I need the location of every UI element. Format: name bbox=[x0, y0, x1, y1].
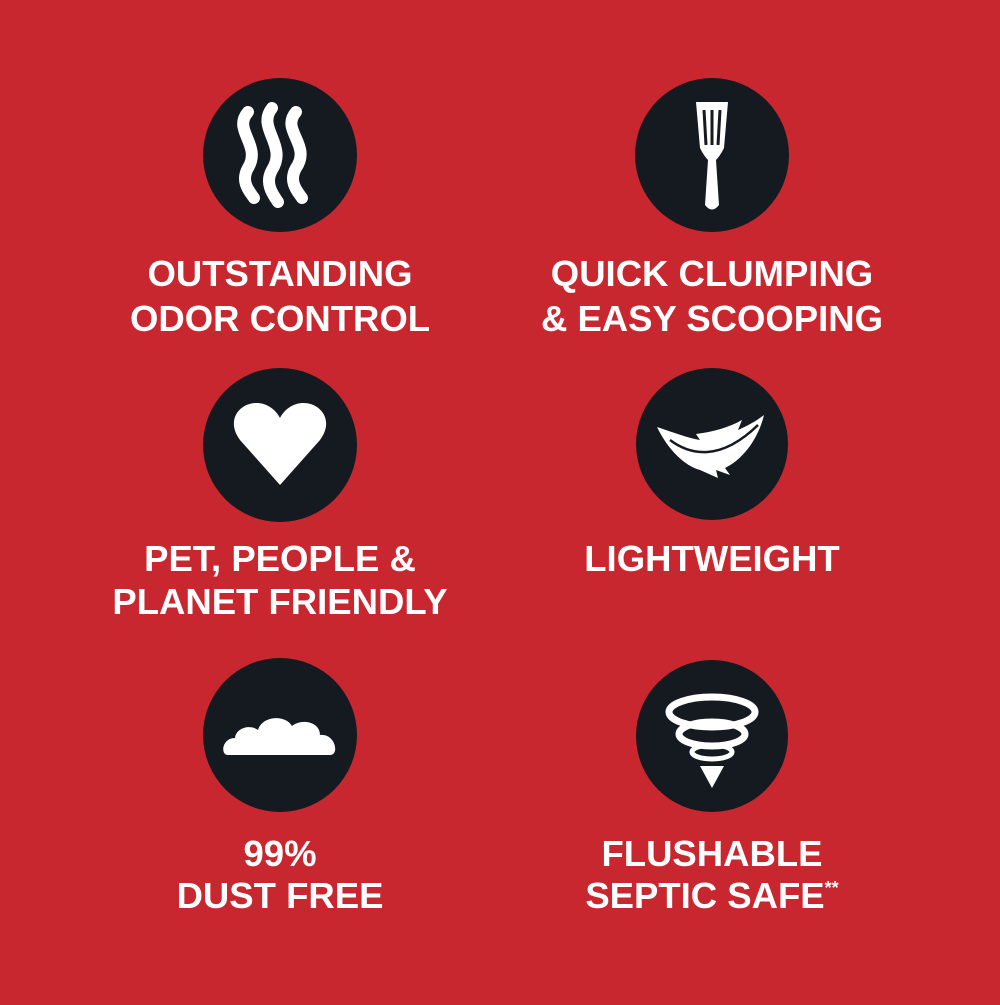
heading: flushable: FLUSHABLE bbox=[601, 833, 823, 874]
heading: flushable: ** bbox=[825, 878, 839, 898]
heading: flushable: SEPTIC SAFE bbox=[585, 875, 839, 916]
panel: friendly bbox=[112, 368, 448, 622]
heading: friendly: PLANET FRIENDLY bbox=[112, 581, 448, 622]
icon: feather bbox=[636, 368, 788, 520]
icon: swirl bbox=[636, 660, 788, 812]
heading: dust free: 99% bbox=[243, 833, 317, 874]
heading: friendly: PET, PEOPLE & bbox=[144, 538, 416, 579]
panel: flushable bbox=[585, 660, 839, 916]
panel: clumping bbox=[541, 78, 883, 339]
icon: spatula bbox=[635, 78, 789, 232]
heading: odor control: ODOR CONTROL bbox=[130, 298, 430, 339]
heading: odor control: OUTSTANDING bbox=[148, 253, 412, 294]
heading: lightweight: LIGHTWEIGHT bbox=[584, 538, 840, 579]
icon: cloud bbox=[203, 658, 357, 812]
panel: lightweight bbox=[584, 368, 840, 579]
icon: heart bbox=[203, 368, 357, 522]
panel: odor control bbox=[130, 78, 430, 339]
heading: clumping: QUICK CLUMPING bbox=[551, 253, 873, 294]
panel: dust free bbox=[177, 658, 383, 916]
icon: odor waves bbox=[203, 78, 357, 232]
heading: dust free: DUST FREE bbox=[177, 875, 383, 916]
heading: clumping: & EASY SCOOPING bbox=[541, 298, 883, 339]
